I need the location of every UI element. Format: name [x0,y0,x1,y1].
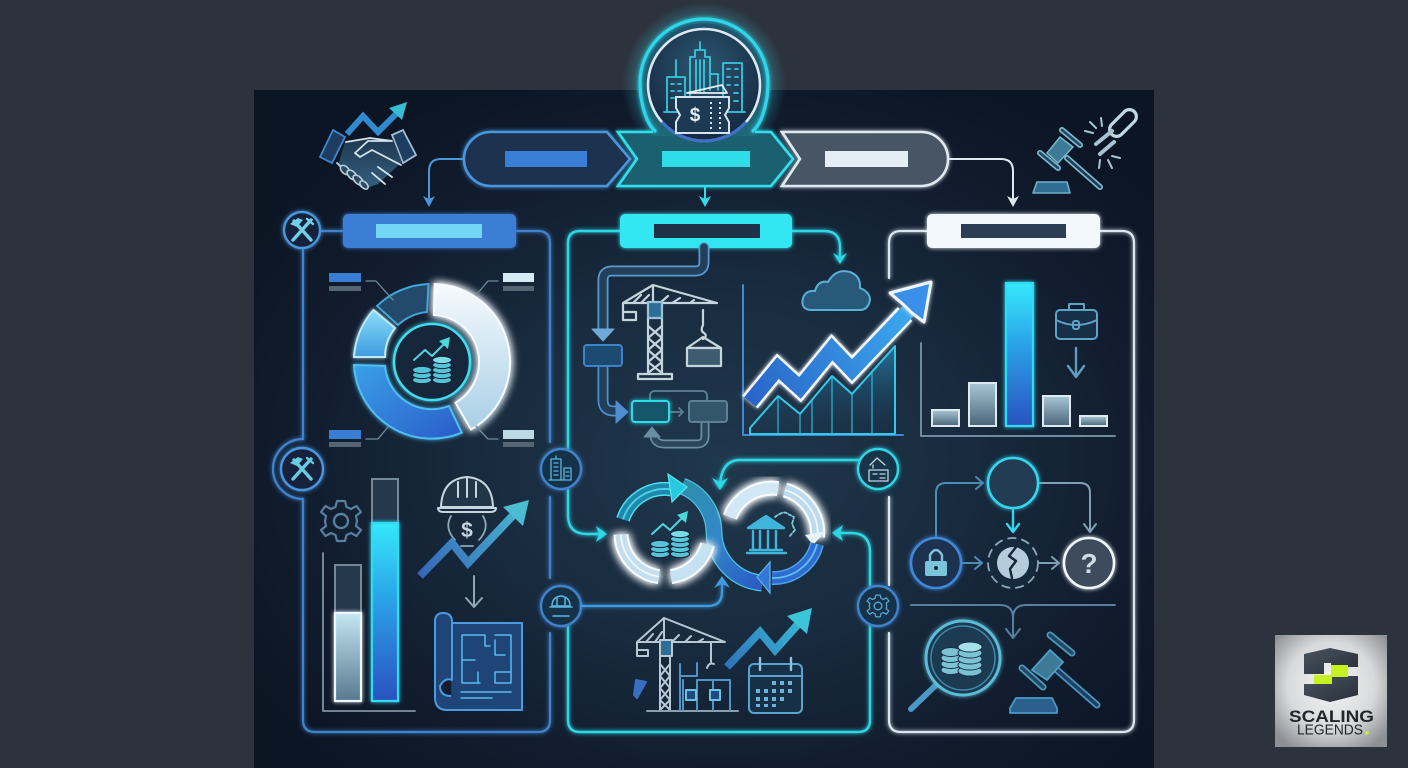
bar five [1080,416,1107,426]
header: middle column [620,214,792,248]
right ring: white right arc [785,490,826,545]
node: tools top [284,212,320,248]
infinity loop diagram [621,474,826,593]
node: house top right [858,449,898,489]
icon: handshake with rising arrow [320,102,416,191]
segment: dark [377,284,428,325]
flow: decision network [911,458,1114,588]
icon: ticket: $ [690,105,701,126]
logo mark [1304,648,1358,702]
bar three highlighted [1006,283,1033,426]
arrow: helmet node to loop [581,576,730,606]
box: process three [689,401,727,422]
right column connector lines [889,231,1134,732]
segment: blue [354,365,462,439]
middle column connector lines [568,231,870,732]
area under line [750,346,895,434]
logo: Scaling Legends: LEGENDS [1297,722,1363,738]
left ring: light lower-left arc [621,534,659,577]
chart: rising line and area [743,282,931,435]
logo: Scaling Legends: SCALING [1289,708,1374,726]
pill: middle stage [618,132,793,186]
dark infographic panel [254,90,1154,768]
donut centre icon [394,324,470,400]
arrow: pill to left header [423,159,463,207]
logo: Scaling Legends [1275,635,1387,747]
bar chart: right column [921,283,1115,436]
bar chart: left column [323,479,415,711]
arrow: rising trend left [420,500,529,576]
node: gear lower right [858,586,898,626]
icon: bank with gear [747,513,795,553]
icon: calendar [749,658,802,713]
arrow: pill to right header [949,159,1019,207]
node: broken disc [988,538,1038,588]
node: hard hat [541,586,581,626]
box: process one [584,345,622,366]
icon: blueprint [435,613,522,710]
icon: tower crane with load [623,285,721,379]
pill: right stage [782,132,948,186]
node: question mark [1064,538,1114,588]
left ring: light bottom-right arc [671,544,708,577]
node: lock [911,538,961,588]
bar: cyan track [372,479,398,701]
bar four [1043,396,1070,426]
connectors [936,477,1096,569]
icon: gavel lower right [1010,635,1097,713]
icon: crane with building under construction [634,618,738,711]
left ring: cyan arc with arrow [623,474,687,519]
node: tools middle [273,439,323,499]
icon: skyline [664,42,745,112]
icon: hard hat with dollar: $ [461,519,473,542]
arrow: down to blueprint [466,576,482,607]
arrow: briefcase down [1068,348,1084,377]
flow: header to process boxes [592,247,704,423]
icon: coins in left ring [650,511,690,558]
segment: large white [434,284,510,430]
arrowheads on middle column lines [596,253,847,542]
divider with merge arrow [911,605,1115,638]
arrow: pill to middle header [699,187,711,207]
logo accent dot [1365,731,1368,734]
header: left column [343,214,516,248]
icon: cloud [802,271,870,310]
icon: gavel and broken chain [1033,107,1139,193]
icon: magnifier with coins [911,621,1000,709]
segment: light blue [354,310,395,357]
S-shaped band [682,486,762,583]
box: process two [632,401,669,422]
donut chart [354,284,510,439]
pill: left stage [464,132,630,186]
right ring: white top arc [730,488,778,517]
bar one [932,410,959,426]
big rising arrow [750,282,931,402]
node: question mark: ? [1080,548,1098,579]
icon: gear left [321,501,361,541]
node: top circle [988,458,1038,508]
right ring: blue bottom arc with arrow [757,544,817,593]
left column connector lines [303,231,550,732]
bar two [969,383,996,426]
badge: city skyline and ticket [640,19,768,141]
glow around top badge [622,2,786,166]
header: right column [927,214,1100,248]
top process pills [464,132,948,186]
arrow: rising trend lower [727,608,812,667]
icon: hard hat with dollar [438,477,496,546]
flow: loop between boxes [644,391,707,444]
node: building left [541,449,581,489]
icon: briefcase [1056,304,1097,339]
bar: white track [335,565,361,701]
donut labels and leaders [329,273,534,447]
